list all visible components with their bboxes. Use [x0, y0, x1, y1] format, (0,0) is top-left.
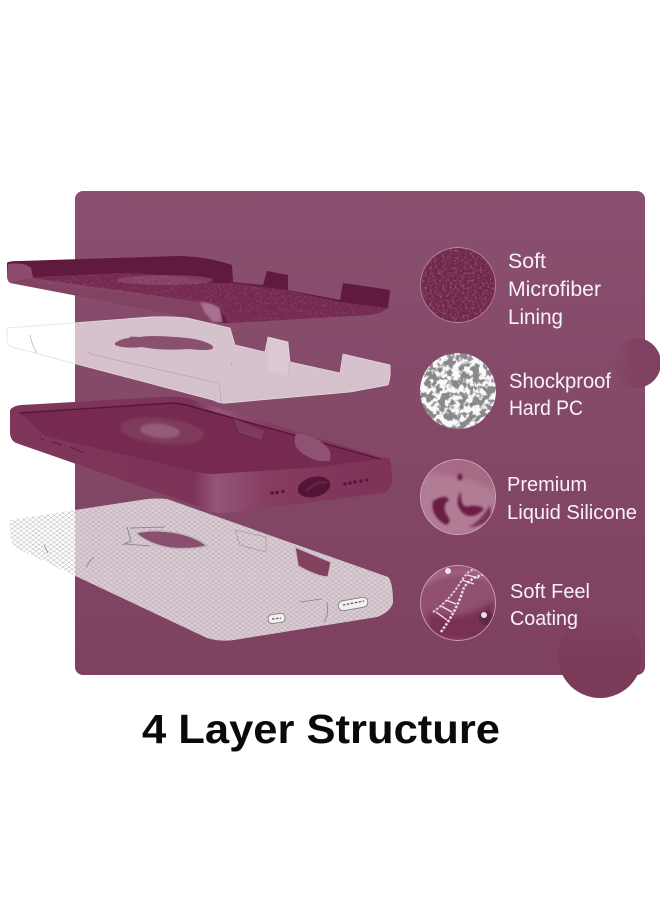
port cutout from inside	[295, 433, 331, 461]
label: shockproof hard PC: Shockproof	[509, 370, 611, 393]
layer 2: clear hard PC	[7, 317, 390, 403]
icon: hard PC beads texture	[420, 353, 496, 431]
label: soft feel coating	[510, 580, 590, 630]
label: premium liquid silicone: Liquid Silicone	[507, 502, 637, 524]
icon: DNA coating	[420, 565, 496, 641]
layer 1: microfiber lining	[7, 256, 392, 324]
port cutouts	[268, 613, 286, 624]
layer 3: liquid silicone shell	[10, 397, 392, 513]
panel: purple background	[75, 191, 660, 675]
charging port	[296, 473, 332, 501]
label: soft feel coating: Soft Feel	[510, 580, 590, 603]
label: premium liquid silicone	[507, 474, 637, 524]
title: 4 Layer Structure	[142, 706, 500, 752]
label: premium liquid silicone: Premium	[507, 474, 587, 496]
speaker holes left	[270, 490, 285, 495]
label: soft microfiber lining	[508, 250, 601, 329]
label: soft microfiber lining: Microfiber	[508, 278, 601, 301]
magsafe cutout	[115, 336, 213, 350]
label: soft microfiber lining: Lining	[508, 306, 563, 329]
icon: liquid silicone drop	[420, 459, 496, 535]
icon: microfiber texture	[420, 247, 496, 323]
layer 4: soft feel coating	[10, 498, 393, 641]
label: shockproof hard PC: Hard PC	[509, 397, 583, 420]
label: soft microfiber lining: Soft	[508, 250, 546, 273]
side buttons recess	[233, 418, 265, 441]
label: shockproof hard PC	[509, 370, 611, 420]
camera opening	[136, 531, 207, 549]
decorative circle: right edge	[611, 338, 660, 388]
decorative circle: bottom right	[558, 614, 642, 698]
label: soft feel coating: Coating	[510, 607, 578, 630]
lens opening	[295, 547, 331, 577]
speaker holes right	[343, 478, 369, 486]
camera ring	[119, 414, 205, 448]
